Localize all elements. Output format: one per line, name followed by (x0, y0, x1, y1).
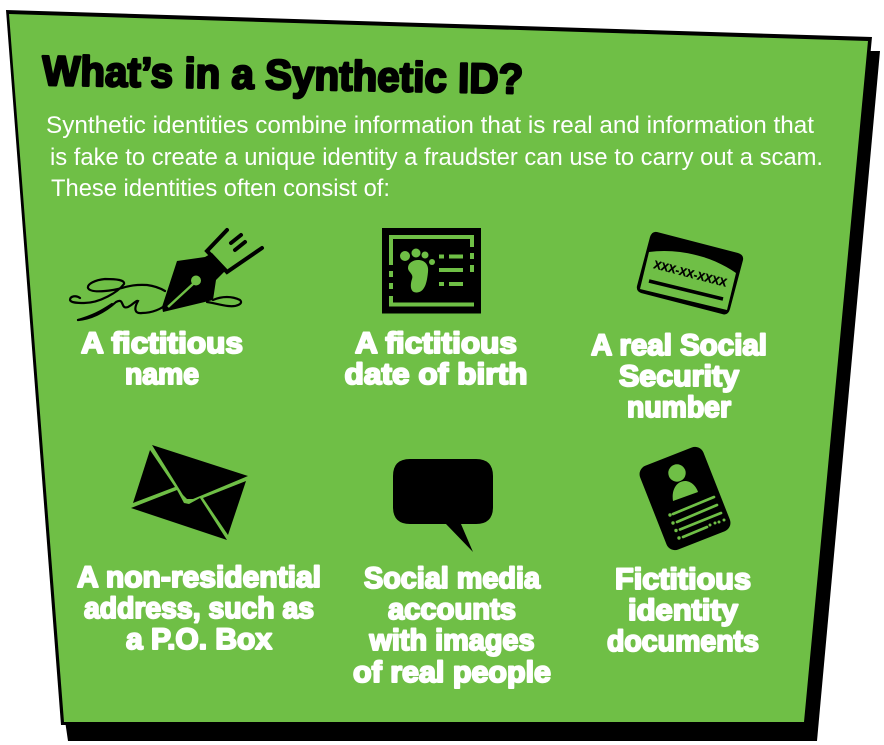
icon: fountain pen signature (70, 230, 262, 320)
label: social media accounts: Social media (364, 562, 540, 595)
label: a non-residential address: a P.O. Box (126, 623, 272, 656)
label: a real social security number: number (627, 391, 731, 424)
label: social media accounts: of real people (353, 656, 551, 689)
label: a real social security number: Security (619, 360, 739, 393)
label: fictitious identity documents: identity (628, 594, 738, 627)
label: fictitious identity documents (607, 563, 759, 658)
intro text: Synthetic identities combine information that is real and information that (46, 112, 814, 139)
label: social media accounts: with images (369, 624, 534, 657)
intro text: is fake to create a unique identity a fraudster can use to carry out a scam. (50, 144, 823, 171)
label: a fictitious date of birth: A fictitious (355, 327, 517, 360)
label: a non-residential address (77, 561, 321, 656)
label: a fictitious name: A fictitious (81, 327, 243, 360)
label: a real social security number: A real Social (591, 329, 767, 362)
label: fictitious identity documents: Fictitious (615, 563, 751, 596)
label: a real social security number (591, 329, 767, 424)
intro text (46, 112, 823, 202)
icon: envelope (131, 445, 248, 540)
icon: footprint certificate (382, 228, 481, 314)
icon: speech bubble (393, 459, 493, 552)
label: a non-residential address: A non-residential (77, 561, 321, 594)
label: a non-residential address: address, such as (84, 592, 314, 625)
label: social media accounts (353, 562, 551, 689)
label: a fictitious date of birth (344, 327, 528, 391)
intro text: These identities often consist of: (51, 175, 390, 202)
label: social media accounts: accounts (388, 593, 516, 626)
icon: identity document (637, 444, 733, 553)
label: a fictitious date of birth: date of birth (344, 358, 528, 391)
label: a fictitious name: name (125, 358, 199, 391)
title: What’s in a Synthetic ID? (42, 47, 524, 102)
icon: social security card: XXX-XX-XXXX (652, 259, 728, 290)
label: a fictitious name (81, 327, 243, 391)
label: fictitious identity documents: documents (607, 625, 759, 658)
icon: social security card (637, 232, 743, 314)
